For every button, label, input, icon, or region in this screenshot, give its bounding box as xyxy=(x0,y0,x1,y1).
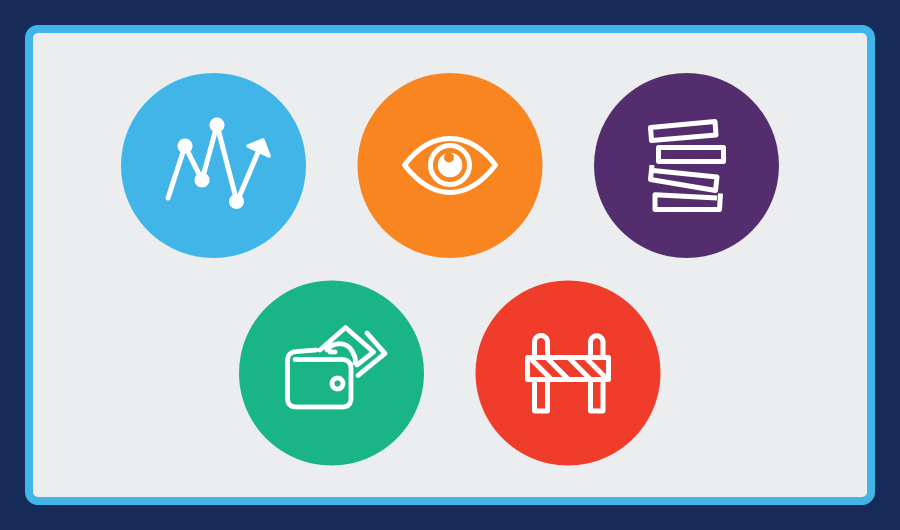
icon badge: green circle with wallet and banknotes xyxy=(239,280,424,466)
icon badge: purple circle with stack of books xyxy=(594,73,779,258)
icon badge: blue circle with line chart xyxy=(121,73,306,258)
icon badge: red circle with road barrier xyxy=(476,280,660,466)
icon badge: orange circle with eye xyxy=(358,73,542,258)
